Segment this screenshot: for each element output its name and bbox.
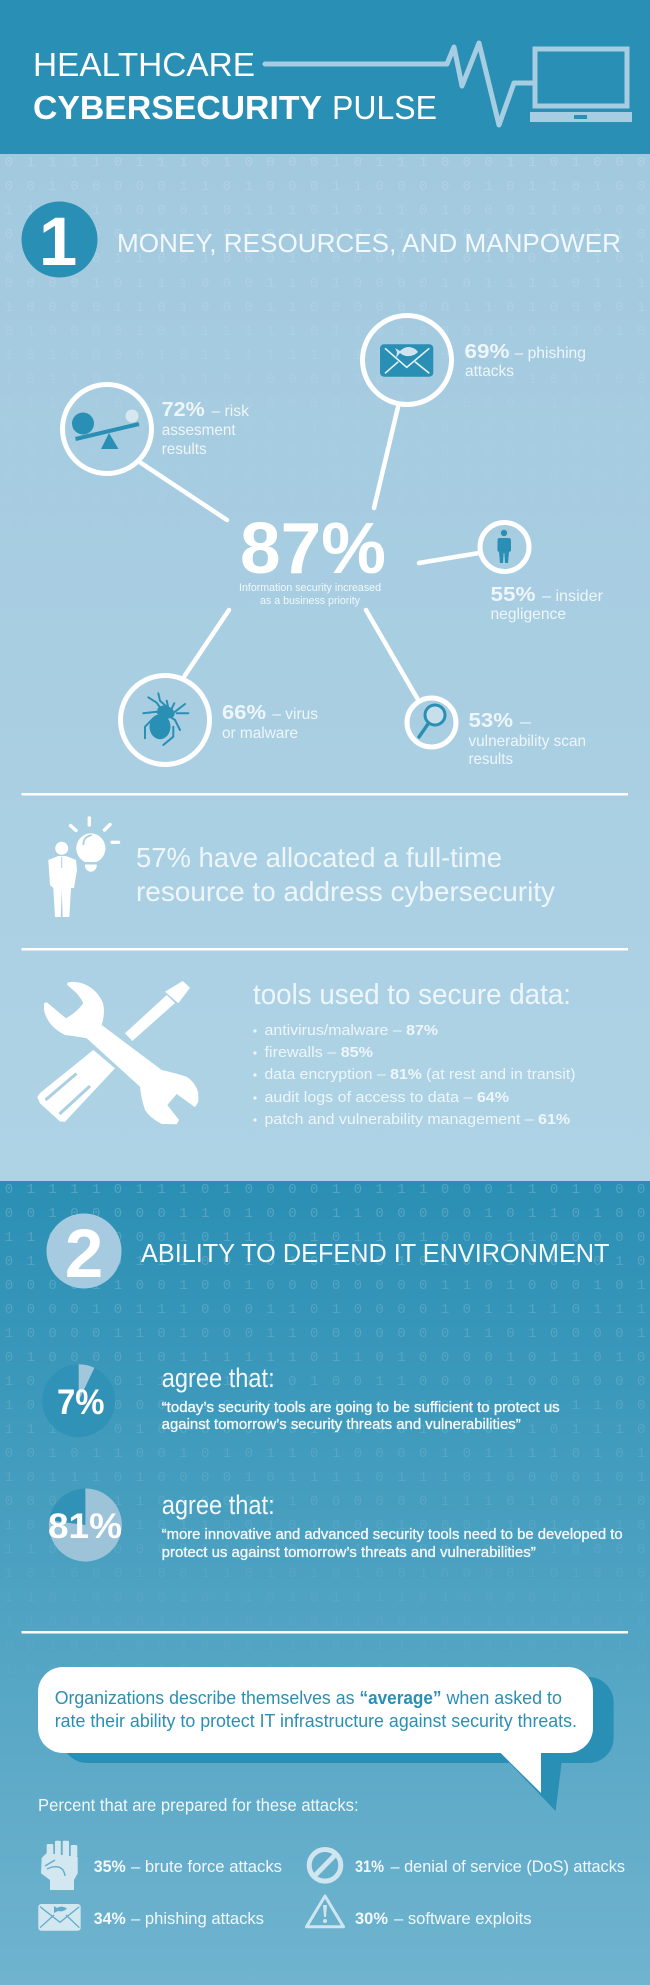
text: prepared for these attacks: Percent that are prepared for these attacks: xyxy=(38,1795,359,1815)
title: CYBERSECURITY xyxy=(33,89,322,126)
text: 53% vulnerability scan results: – xyxy=(520,714,531,731)
text: 81% agree that xyxy=(162,1490,623,1561)
text: 55% insider negligence: 55% xyxy=(490,584,536,606)
binary pattern: section 2 xyxy=(5,1182,650,1678)
text: 69% phishing attacks xyxy=(464,341,586,380)
icon: person with light bulb xyxy=(48,818,118,917)
bullet list of tools: antivirus/malware – 87% xyxy=(264,1022,438,1039)
pie chart: 7%: 7% xyxy=(57,1383,104,1422)
binary pattern: section 2: 100100010100110101000010110100 xyxy=(5,1662,650,1678)
central statistic: 87%: 87% xyxy=(240,509,386,589)
binary pattern: section 2: 110010001011101011010001100000 xyxy=(5,1230,650,1246)
pie chart: 81%: 81% xyxy=(48,1507,122,1546)
binary pattern: section 1: 010000111001010100101001000010 xyxy=(5,227,650,243)
text: 53% vulnerability scan results: vulnerability scan xyxy=(468,733,586,750)
binary pattern: section 2: 101110100001011110111010000101 xyxy=(5,1470,650,1486)
binary pattern: section 2: 000011001001000000001101000101 xyxy=(5,1278,650,1294)
binary pattern: section 1: 001010010100001011110110111101 xyxy=(5,420,650,436)
icon: envelope xyxy=(38,1904,81,1931)
text: 66% virus or malware: 66% xyxy=(222,702,266,724)
binary pattern: section 2: 110100001011010111101000010111 xyxy=(5,1590,650,1606)
callout: speech bubble: Organizations describe themselves as xyxy=(55,1687,354,1708)
binary pattern: section 2: 010000111001010100101001000010 xyxy=(5,1254,650,1270)
binary pattern: section 1: 101011010111101110110100010101 xyxy=(5,444,650,460)
binary pattern: section 1: 000010111000110100001011110111 xyxy=(5,276,650,292)
text: 72% risk assesment results: results xyxy=(162,441,207,458)
text: 31% denial of service: – denial of service (DoS) attacks xyxy=(390,1857,625,1876)
text: tools used to secure data: tools used to secure data: xyxy=(253,979,571,1011)
text: 66% virus or malware: or malware xyxy=(222,725,298,742)
bullet list of tools: audit logs of access to data – 64% xyxy=(264,1089,509,1106)
text: 57% full-time resource: resource to address cybersecurity xyxy=(136,876,555,907)
binary pattern: section 2: 110100000110100110000100010000 xyxy=(5,1542,650,1558)
icon: pulse line xyxy=(265,43,533,125)
pie chart: 7% xyxy=(42,1364,115,1437)
text: 35% brute force: – brute force attacks xyxy=(131,1857,282,1876)
text: 81% agree that: “more innovative and advanced security tools need to be developed to xyxy=(162,1527,623,1543)
section 1 number badge xyxy=(22,202,98,280)
binary pattern: section 2: 111100100000001100010000101110 xyxy=(5,1422,650,1438)
title: HEALTHCARE xyxy=(33,46,255,83)
text: 31% denial of service: 31% xyxy=(355,1857,384,1876)
section 2 number badge: 2 xyxy=(65,1215,103,1292)
text: 69% phishing attacks: 69% xyxy=(464,341,510,363)
panel: section 1 background xyxy=(0,154,650,1181)
binary pattern: section 2: 100001101000110000000110100001 xyxy=(5,1326,650,1342)
binary pattern: section 1: 011110111010000101110001101000 xyxy=(5,155,650,171)
panel: section 2 background xyxy=(0,1181,650,1985)
connector lines to the central statistic xyxy=(141,407,479,698)
binary pattern: section 1: 111110100100000010111000010111 xyxy=(5,396,650,412)
binary pattern: section 2: 100010000100001101000110101100 xyxy=(5,1398,650,1414)
text: 34% phishing: 34% xyxy=(94,1909,126,1928)
bullet list of tools: data encryption – 81% (at rest and in transit) xyxy=(264,1066,576,1083)
icon: virus bug in circle xyxy=(120,676,210,764)
text: 81% agree that: protect us against tomorrow’s threats and vulnerabilities” xyxy=(162,1545,536,1561)
binary pattern: section 2: 001011001000110001101001010010 xyxy=(5,1638,650,1654)
binary pattern: section 2: 101100101100101000100011010110 xyxy=(5,1518,650,1534)
binary pattern: section 1: 010000101111110110100001011010 xyxy=(5,324,650,340)
binary pattern: section 2: 101000100110101010010000101000 xyxy=(5,1566,650,1582)
binary pattern: section 2: 110000011010100110000010100010 xyxy=(5,1614,650,1630)
text: 53% vulnerability scan results xyxy=(468,710,586,768)
binary pattern: section 1: 001000001101000110000010110100 xyxy=(5,179,650,195)
text: 7% agree that xyxy=(162,1363,560,1433)
text: 34% phishing: – phishing attacks xyxy=(131,1909,264,1928)
binary pattern: section 2: 010000101111110110100001011010 xyxy=(5,1350,650,1366)
callout: speech bubble: “average” xyxy=(360,1687,442,1708)
text: 53% vulnerability scan results: results xyxy=(468,751,513,768)
icon: magnifying glass in circle xyxy=(407,698,456,747)
text: 7% agree that: against tomorrow’s security threats and vulnerabilities” xyxy=(162,1417,521,1433)
binary pattern: section 1: 101000010111111011110001000 xyxy=(5,348,593,364)
text: 72% risk assesment results: 72% xyxy=(162,399,205,421)
binary pattern: section 1 xyxy=(5,155,650,532)
icon: warning triangle xyxy=(306,1896,344,1927)
binary pattern: section 2: 011110111010000101110001101000 xyxy=(5,1182,650,1198)
title: PULSE xyxy=(332,89,437,126)
text: 72% risk assesment results xyxy=(162,399,250,458)
text: 7% agree that: “today’s security tools are going to be sufficient to protect us xyxy=(162,1400,560,1416)
text: 35% brute force: 35% xyxy=(94,1857,126,1876)
binary pattern: section 1: 100001101000110000000110100001 xyxy=(5,300,650,316)
text: 81% agree that: agree that: xyxy=(162,1490,275,1520)
text: 66% virus or malware: – virus xyxy=(272,706,318,723)
title xyxy=(33,46,437,126)
text: 53% vulnerability scan results: 53% xyxy=(468,710,513,732)
text: 72% risk assesment results: assesment xyxy=(162,422,236,439)
text: 66% virus or malware xyxy=(222,702,318,742)
bullet list of tools: patch and vulnerability management – 61% xyxy=(264,1111,570,1128)
bullet list of tools: firewalls – 85% xyxy=(264,1044,373,1061)
binary pattern: section 2: 101000111111101001100001000000 xyxy=(5,1374,650,1390)
central statistic: 87%: as a business priority xyxy=(260,595,360,607)
text: 57% full-time resource: 57% have allocated a full-time xyxy=(136,842,502,873)
text: 69% phishing attacks: – phishing xyxy=(514,345,586,362)
icon: fist xyxy=(41,1841,78,1890)
text: 30% software exploits: – software exploits xyxy=(394,1909,532,1928)
binary pattern: section 2: 000001101000010000001110100010 xyxy=(5,1494,650,1510)
icon: no sign xyxy=(309,1850,341,1881)
text: 57% full-time resource xyxy=(136,842,555,907)
bullet list of tools xyxy=(253,1022,576,1128)
icon: risk balance in circle xyxy=(62,384,152,474)
text: 69% phishing attacks: attacks xyxy=(465,363,514,380)
text: tools used to secure data xyxy=(253,979,576,1128)
icon: wrench and screwdriver xyxy=(37,981,198,1124)
binary pattern: section 1: 000010010100100001000101000010 xyxy=(5,468,650,484)
central statistic: 87%: Information security increased xyxy=(239,582,381,594)
icon: laptop xyxy=(530,49,632,122)
text: 55% insider negligence: – insider xyxy=(542,588,604,605)
binary pattern: section 1: 101101011101000010111010101100 xyxy=(5,372,650,388)
binary pattern: section 2: 000010111000110100001011110111 xyxy=(5,1302,650,1318)
binary pattern: section 1: 110100101001011010000010110100 xyxy=(5,492,650,508)
section 2 number badge xyxy=(46,1214,122,1292)
pie chart: 81% xyxy=(48,1488,122,1562)
heading: section 1: MONEY, RESOURCES, AND MANPOWER xyxy=(117,228,621,258)
text: 30% software exploits: 30% xyxy=(355,1909,388,1928)
icon: insider person in circle xyxy=(480,522,529,572)
heading: section 2: ABILITY TO DEFEND IT ENVIRONMENT xyxy=(141,1238,610,1268)
callout: speech bubble: when asked to xyxy=(446,1687,562,1708)
text: 55% insider negligence: negligence xyxy=(490,606,566,623)
text: 72% risk assesment results: – risk xyxy=(211,403,250,420)
binary pattern: section 1: 001101100100010000011010000101 xyxy=(5,251,650,267)
text: 7% agree that: agree that: xyxy=(162,1363,275,1393)
text: 55% insider negligence xyxy=(490,584,604,623)
callout: speech bubble: rate their ability to protect IT infrastructure against security threats. xyxy=(55,1710,577,1731)
panel: header xyxy=(0,0,650,154)
icon: phishing envelope in circle xyxy=(362,316,452,404)
callout: speech bubble xyxy=(38,1667,614,1811)
binary pattern: section 2: 001000001101000110000010110100 xyxy=(5,1206,650,1222)
section 1 number badge: 1 xyxy=(39,203,77,280)
binary pattern: section 1: 110100010010001110001001000010 xyxy=(5,516,650,532)
binary pattern: section 1: 110010000101110101101000110000 xyxy=(5,203,650,219)
binary pattern: section 2: 001011001010110100001011110101 xyxy=(5,1446,650,1462)
